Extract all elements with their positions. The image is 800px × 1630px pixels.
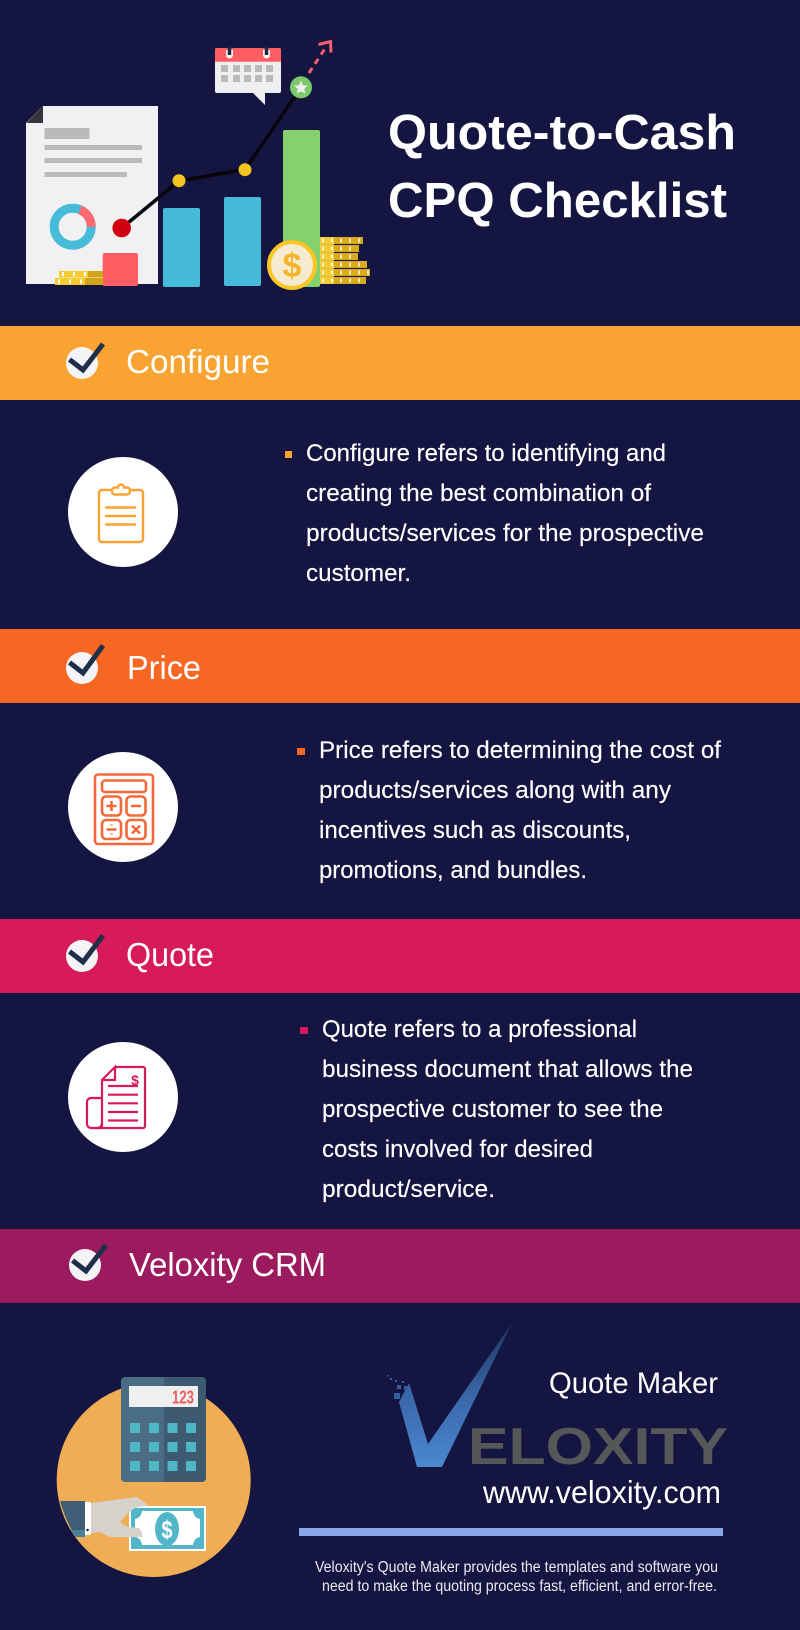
banknote: [129, 1506, 206, 1551]
website url: www.veloxity.com: [482, 1474, 721, 1510]
text block: incentives such as discounts,: [319, 817, 631, 844]
text block: products/services for the prospective: [306, 520, 704, 547]
document page: [26, 106, 158, 284]
text block: [300, 1016, 693, 1203]
dollar coin: [269, 242, 315, 288]
dollar coin: $: [283, 247, 302, 285]
blue bar 1: [163, 208, 200, 287]
left coin stack: [55, 271, 103, 285]
divider bar: [299, 1528, 723, 1536]
icon: check mark: [69, 1245, 106, 1281]
text block: business document that allows the: [322, 1056, 693, 1083]
section band: Quote: [0, 919, 800, 993]
footer description: Veloxity's Quote Maker provides the templates and software you: [315, 1559, 718, 1576]
text block: Quote refers to a professional: [322, 1016, 637, 1043]
label: Quote Maker: Quote Maker: [549, 1367, 718, 1400]
icon: quote document: [68, 1042, 178, 1152]
section band: Configure: [0, 326, 800, 400]
icon: quote document: $: [131, 1072, 139, 1088]
text block: [297, 737, 721, 884]
blue bar 2: [224, 197, 261, 286]
green bar: [283, 130, 320, 287]
heading: Veloxity CRM: Veloxity CRM: [129, 1246, 326, 1283]
section band: Price: [0, 629, 800, 703]
donut chart: [54, 208, 91, 245]
trend line: [122, 88, 301, 228]
panel: Configure description: [68, 440, 704, 587]
calculator: [121, 1377, 206, 1482]
red point: [112, 219, 131, 237]
heading: Price: Price: [127, 649, 201, 686]
yellow point 1: [172, 174, 186, 187]
footer description: [315, 1559, 718, 1595]
green star point: [290, 76, 312, 98]
dashed arrow: [309, 42, 331, 73]
text block: product/service.: [322, 1176, 495, 1203]
header illustration: report and growth chart: [26, 42, 370, 288]
right coin stack: [320, 237, 370, 284]
title: Quote-to-Cash: [388, 106, 736, 160]
text block: prospective customer to see the: [322, 1096, 663, 1123]
panel: Quote description: [68, 1016, 693, 1203]
heading: Configure: Configure: [126, 343, 270, 380]
panel: Price description: [68, 737, 721, 884]
text block: [285, 440, 704, 587]
illustration: calculator and hand with money: [57, 1377, 251, 1577]
title: CPQ Checklist: [388, 174, 727, 228]
orange circle: [57, 1383, 251, 1577]
calendar speech bubble: [215, 47, 281, 105]
calculator: 123: [172, 1388, 194, 1408]
icon: clipboard: [68, 457, 178, 567]
icon: check mark: [66, 646, 103, 684]
text block: customer.: [306, 560, 411, 587]
logo wordmark: ELOXITY: [468, 1418, 728, 1476]
Veloxity logo: [387, 1323, 728, 1476]
text block: promotions, and bundles.: [319, 857, 587, 884]
heading: Quote: Quote: [126, 936, 214, 973]
text block: costs involved for desired: [322, 1136, 593, 1163]
text block: Price refers to determining the cost of: [319, 737, 721, 764]
text block: creating the best combination of: [306, 480, 651, 507]
text block: Configure refers to identifying and: [306, 440, 666, 467]
text block: products/services along with any: [319, 777, 671, 804]
hand and sleeve: [60, 1497, 148, 1537]
icon: calculator: [68, 752, 178, 862]
title: [388, 106, 736, 228]
banknote: $: [162, 1516, 173, 1544]
footer description: need to make the quoting process fast, efficient, and error-free.: [322, 1578, 717, 1595]
logo mark: V: [387, 1323, 512, 1467]
section band: Veloxity CRM: [0, 1229, 800, 1303]
red square: [103, 253, 138, 286]
icon: check mark: [66, 936, 103, 972]
icon: check mark: [66, 344, 103, 379]
yellow point 2: [238, 163, 252, 176]
